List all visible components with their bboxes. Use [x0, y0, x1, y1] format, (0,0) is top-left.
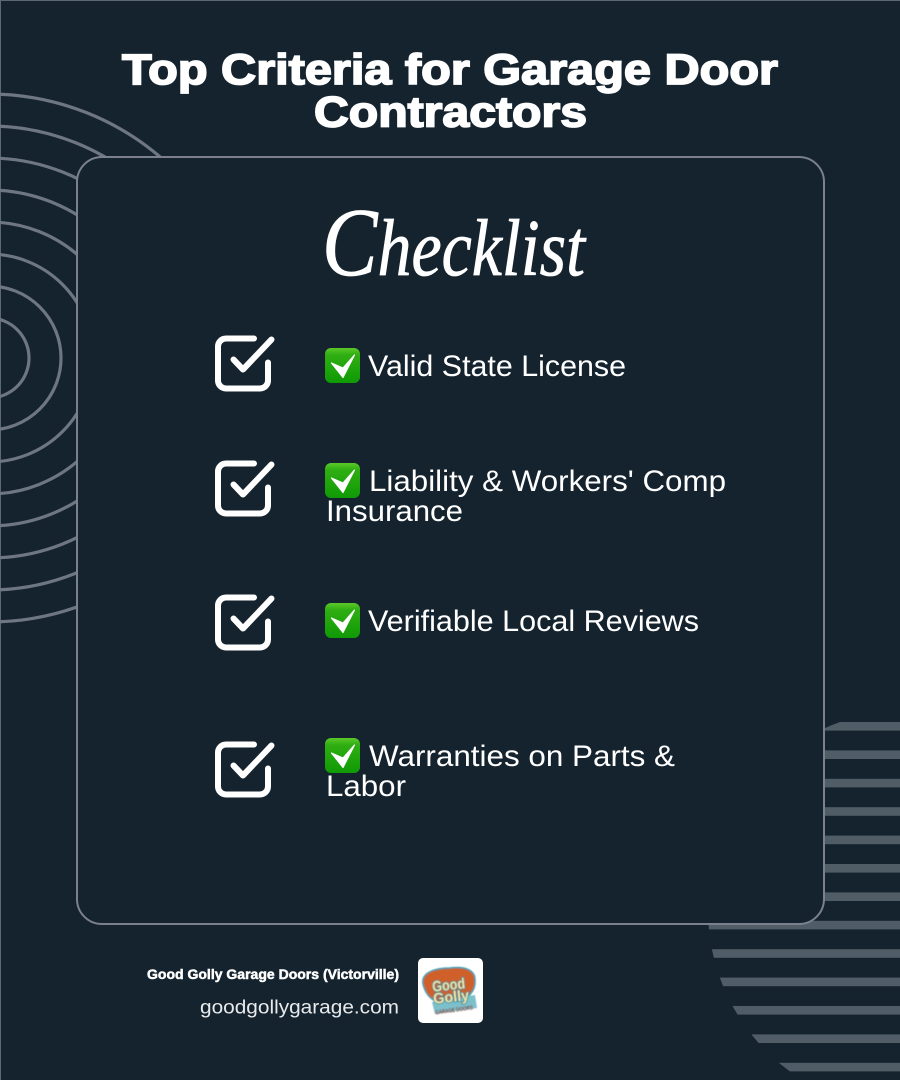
icon: checkbox: [218, 598, 272, 648]
decorative striped circle: [700, 722, 900, 1071]
text: liability and insurance: Liability & Workers' Comp: [369, 465, 726, 498]
logo: [418, 958, 483, 1023]
title: Top Criteria for Garage Door: [122, 46, 778, 94]
row: insurance: [218, 463, 726, 528]
row: warranties: [218, 738, 675, 803]
logo: Golly: [432, 987, 471, 1008]
icon: green check: [325, 348, 360, 383]
icon: green check: [325, 738, 360, 773]
icon: checkbox: [218, 464, 272, 514]
text: verifiable local reviews: Verifiable Local Reviews: [368, 605, 699, 638]
text: valid state license: Valid State License: [368, 350, 626, 383]
decorative concentric rings: [0, 94, 253, 622]
checklist heading: Checklist: [322, 189, 586, 297]
footer company name: Good Golly Garage Doors (Victorville): [147, 966, 399, 982]
text: liability and insurance: Insurance: [326, 495, 463, 528]
icon: green check: [325, 463, 360, 498]
icon: green check: [325, 603, 360, 638]
icon: checkbox: [218, 338, 272, 388]
footer website: goodgollygarage.com: [200, 998, 399, 1018]
panel background: [77, 157, 824, 924]
row: valid state license: [218, 338, 626, 388]
text: warranties on parts and labor: Labor: [326, 770, 406, 803]
row: reviews: [218, 598, 699, 648]
text: liability and insurance: [326, 465, 726, 528]
title: Contractors: [314, 88, 587, 136]
text: warranties on parts and labor: Warranties on Parts &: [369, 740, 675, 773]
text: warranties on parts and labor: [326, 740, 675, 803]
icon: checkbox: [218, 744, 272, 794]
logo: Good: [431, 975, 466, 996]
panel: checklist: [77, 157, 824, 924]
logo: GARAGE DOORS: [435, 1005, 473, 1017]
title: [122, 46, 778, 136]
